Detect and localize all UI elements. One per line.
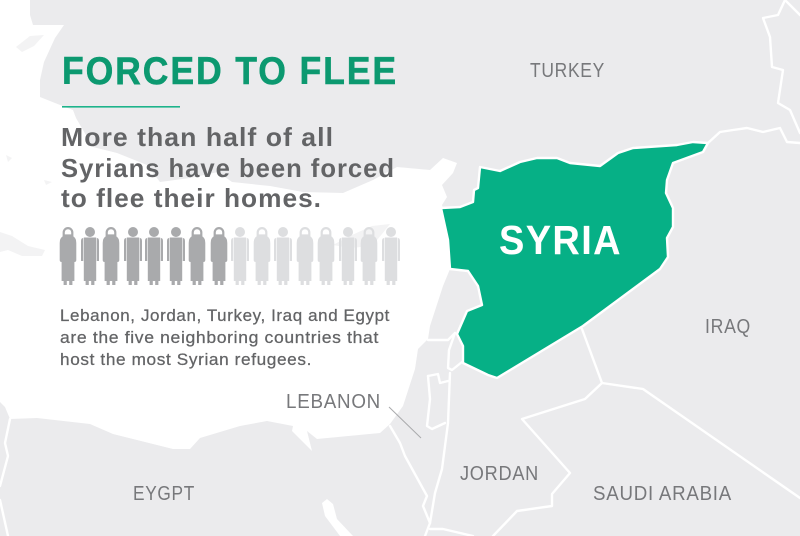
body text [60, 307, 390, 369]
title underline [62, 106, 180, 108]
body text: Lebanon, Jordan, Turkey, Iraq and Egypt [60, 307, 390, 325]
map: Syria [441, 142, 708, 378]
leader line: Lebanon [389, 407, 421, 438]
heading: More than half of all [61, 122, 334, 152]
label: Egypt: EYGPT [133, 483, 195, 505]
label: Lebanon: LEBANON [286, 391, 381, 413]
label: Iraq: IRAQ [705, 316, 751, 338]
red sea gulf [322, 499, 353, 536]
label: Jordan: JORDAN [460, 463, 539, 485]
heading: Syrians have been forced [61, 153, 395, 183]
heading: to flee their homes. [61, 183, 322, 213]
heading [61, 122, 395, 213]
faint islands [0, 35, 390, 256]
sea: Mediterranean [0, 0, 457, 451]
label: Saudi Arabia: SAUDI ARABIA [593, 483, 732, 505]
title: FORCED TO FLEE [62, 50, 398, 93]
label: Syria: SYRIA [499, 217, 622, 263]
body text: are the five neighboring countries that [60, 329, 379, 347]
body text: host the most Syrian refugees. [60, 351, 312, 369]
label: Turkey: TURKEY [530, 60, 605, 82]
people pictogram: dark group [60, 227, 227, 285]
people pictogram: light group [231, 227, 400, 285]
